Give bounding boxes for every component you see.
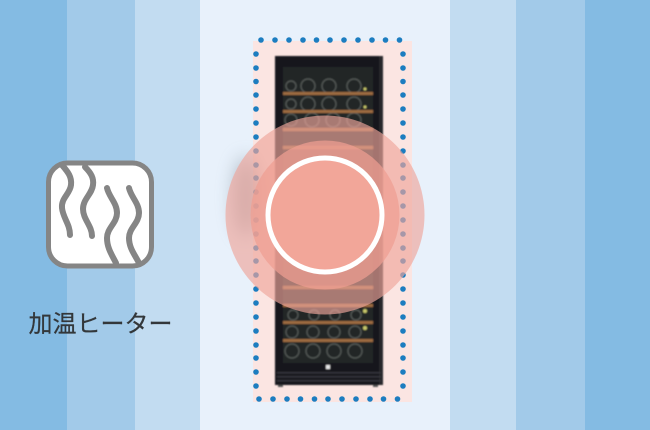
indicator lights xyxy=(363,88,367,330)
logo badge xyxy=(326,365,330,369)
left shadow of glow xyxy=(234,157,258,237)
core circle with white outline xyxy=(268,158,382,272)
pink heated zone behind cabinet xyxy=(253,41,412,402)
glass door xyxy=(283,67,373,363)
wooden shelves xyxy=(283,92,373,342)
middle glow ring xyxy=(250,140,400,290)
heat glow circles xyxy=(226,116,424,314)
bottles xyxy=(285,79,362,358)
outer glow ring xyxy=(226,116,424,314)
icon: heater xyxy=(48,163,152,266)
cabinet body xyxy=(275,56,383,385)
label: heater: 加温ヒーター xyxy=(28,311,172,338)
feet xyxy=(278,385,283,387)
wine cabinet xyxy=(275,56,383,387)
bottom grille xyxy=(277,372,381,382)
dotted outline xyxy=(253,37,406,402)
